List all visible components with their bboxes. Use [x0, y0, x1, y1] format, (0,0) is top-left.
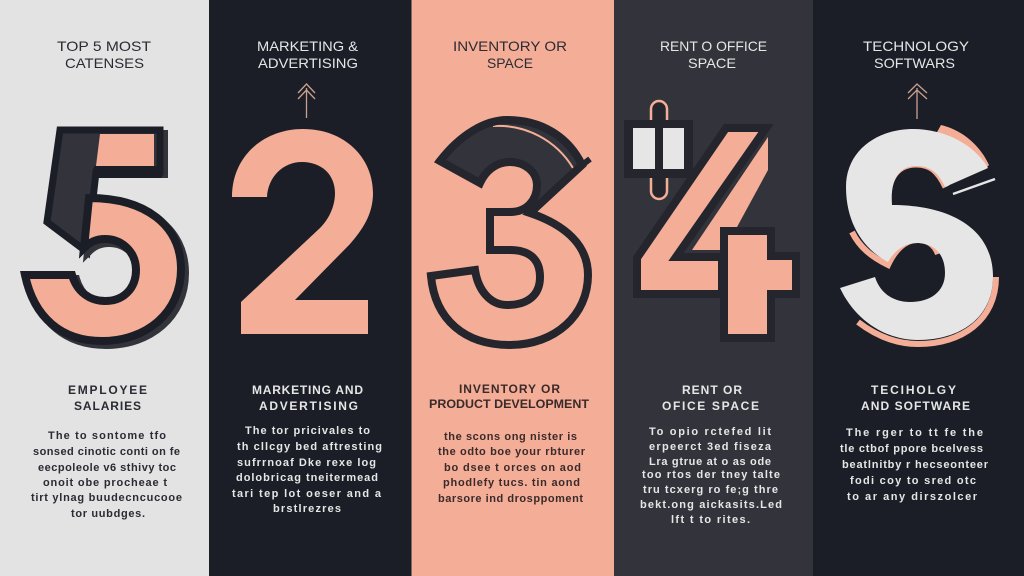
- body text: inventory: barsore ind drosppoment: [438, 493, 583, 505]
- body text: rent: lft t to rites.: [671, 514, 750, 526]
- body text: rent: [640, 426, 782, 526]
- body text: marketing: sufrrnoaf Dke rexe log: [237, 457, 376, 469]
- heading: rent: RENT O OFFICE: [660, 38, 767, 54]
- heading: marketing: ADVERTISING: [258, 55, 358, 71]
- heading: marketing: MARKETING &: [257, 38, 359, 54]
- body text: rent: bekt.ong aickasits.Led: [640, 499, 782, 511]
- numeral: 2: [232, 129, 373, 334]
- panel: employee salaries: [0, 0, 209, 576]
- heading: inventory: SPACE: [487, 55, 533, 71]
- body text: employee salaries: onoit obe procheae t: [43, 477, 167, 489]
- heading: technology: SOFTWARS: [874, 55, 955, 71]
- body text: technology: beatlnitby r hecseonteer: [842, 459, 989, 471]
- numeral: 5: [25, 130, 185, 345]
- subheading: rent or office space: RENT OR: [682, 383, 742, 397]
- body text: technology: [840, 427, 989, 503]
- body text: rent: erpeerct 3ed fiseza: [649, 441, 772, 453]
- numeral: 4: [637, 128, 796, 338]
- body text: technology: to ar any dirszolcer: [847, 491, 978, 503]
- body text: employee salaries: [31, 430, 182, 520]
- body text: employee salaries: sonsed cinotic conti on fe: [33, 446, 180, 458]
- icon: up arrow: [298, 84, 315, 118]
- panel: rent or office space: [614, 0, 813, 576]
- heading: top 5 most: [57, 38, 151, 71]
- body text: technology: fodi coy to sred otc: [850, 475, 976, 487]
- subheading: technology and software: TECIHOLGY: [871, 383, 956, 397]
- heading: technology: TECHNOLOGY: [863, 38, 970, 54]
- subheading: marketing and advertising: MARKETING AND: [252, 383, 363, 397]
- panel: inventory or product development: [412, 0, 614, 576]
- icon: up arrow: [908, 84, 927, 119]
- heading: rent: [660, 38, 767, 71]
- body text: marketing: tari tep lot oeser and a: [232, 488, 382, 500]
- subheading: technology and software: [861, 383, 970, 413]
- subheading: rent or office space: [662, 383, 759, 413]
- subheading: inventory or product development: [429, 382, 590, 411]
- body text: employee salaries: tor uubdges.: [71, 508, 145, 520]
- numeral: 3: [431, 120, 590, 345]
- subheading: inventory or product development: PRODUCT DEVELOPMENT: [429, 397, 590, 411]
- body text: employee salaries: tirt ylnag buudecncucooe: [31, 492, 182, 504]
- body text: inventory: bo dsee t orces on aod: [444, 462, 581, 474]
- body text: inventory: [438, 431, 586, 505]
- subheading: marketing and advertising: [252, 383, 363, 413]
- body text: marketing: brstlrezres: [273, 503, 341, 515]
- body text: employee salaries: eecpoleole v6 sthivy toc: [38, 462, 176, 474]
- numeral: S: [840, 125, 996, 344]
- body text: technology: tle ctbof ppore bcelvess: [840, 443, 983, 455]
- subheading: employee salaries: SALARIES: [74, 399, 141, 413]
- body text: inventory: the scons ong nister is: [444, 431, 577, 443]
- body text: rent: too rtos der tney talte: [642, 469, 780, 481]
- subheading: employee salaries: EMPLOYEE: [68, 383, 147, 397]
- subheading: technology and software: AND SOFTWARE: [861, 399, 970, 413]
- body text: marketing: The tor pricivales to: [245, 425, 370, 437]
- body text: technology: The rger to tt fe the: [846, 427, 983, 439]
- body text: employee salaries: The to sontome tfo: [48, 430, 166, 442]
- body text: marketing: dolobricag tneitermead: [236, 472, 378, 484]
- body text: marketing: [232, 425, 382, 515]
- body text: inventory: phodlefy tucs. tin aond: [443, 477, 580, 489]
- heading: inventory: [453, 38, 567, 71]
- panel: technology and software: [813, 0, 1024, 576]
- subheading: employee salaries: [68, 383, 147, 413]
- subheading: marketing and advertising: ADVERTISING: [259, 399, 358, 413]
- icon: binder clip: [624, 101, 693, 199]
- body text: inventory: the odto boe your rbturer: [438, 446, 586, 458]
- heading: inventory: INVENTORY OR: [453, 38, 567, 54]
- heading: rent: SPACE: [688, 55, 736, 71]
- panel: marketing and advertising: [209, 0, 412, 576]
- heading: marketing: [257, 38, 359, 71]
- body text: marketing: th cllcgy bed aftresting: [237, 441, 382, 453]
- body text: rent: Lra gtrue at o as ode: [649, 456, 771, 468]
- heading: technology: [863, 38, 970, 71]
- heading: top 5 most: CATENSES: [65, 55, 144, 71]
- body text: rent: tru tcxerg ro fe;g thre: [643, 484, 778, 496]
- subheading: rent or office space: OFICE SPACE: [662, 399, 759, 413]
- subheading: inventory or product development: INVENTORY OR: [459, 382, 560, 396]
- heading: top 5 most: TOP 5 MOST: [57, 38, 151, 54]
- body text: rent: To opio rctefed lit: [649, 426, 771, 438]
